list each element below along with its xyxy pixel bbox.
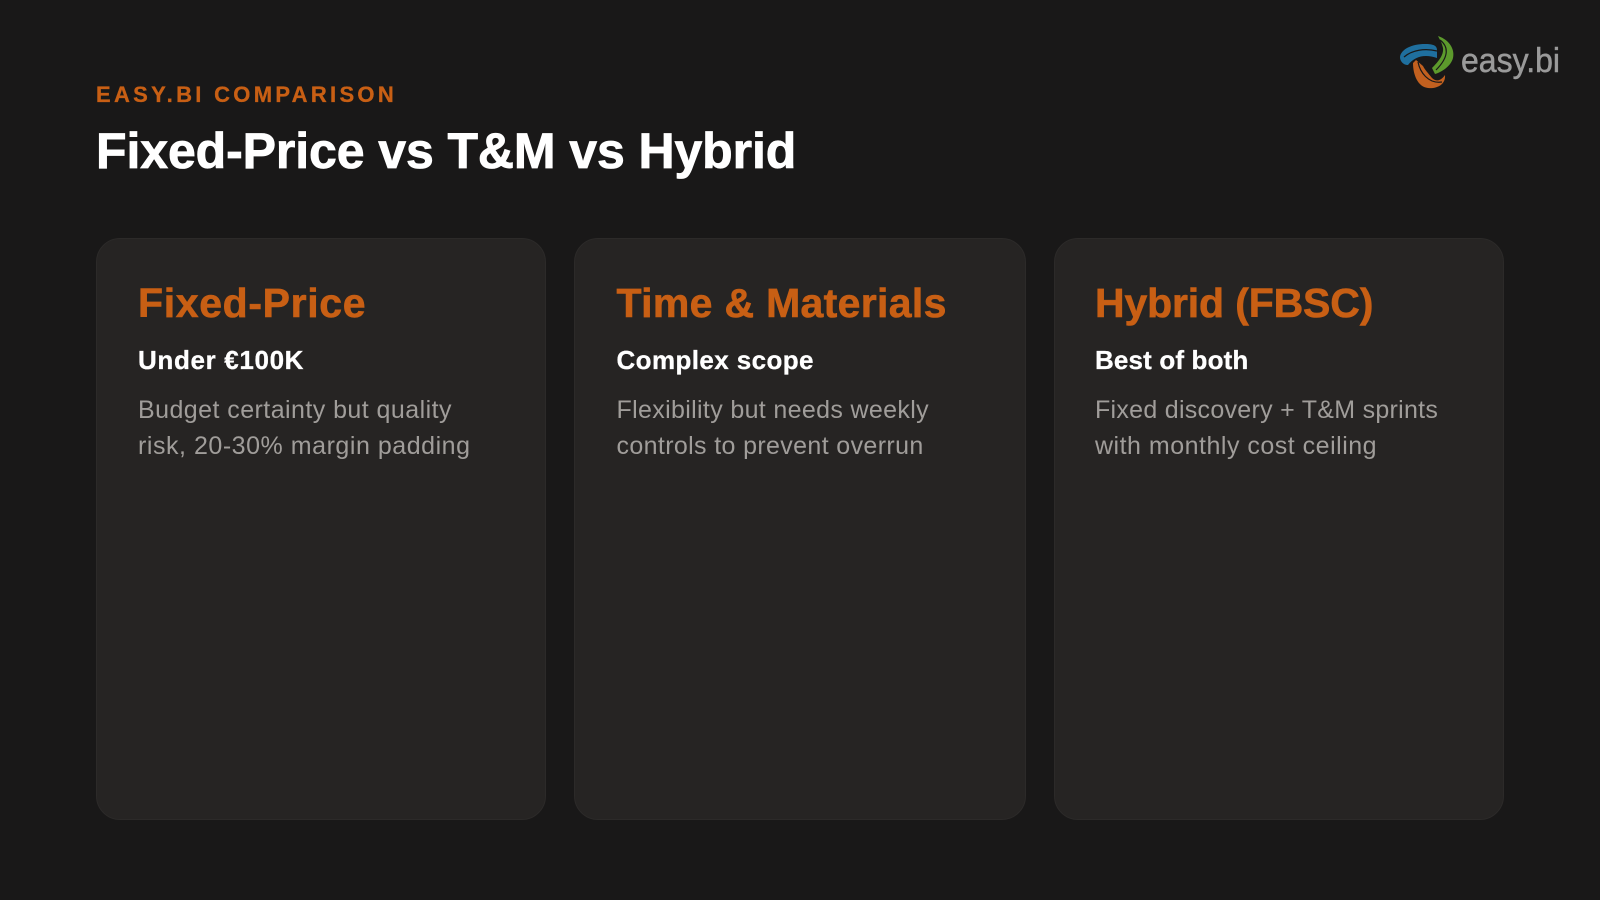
subheading: Best of both: Best of both	[1095, 345, 1248, 375]
title: Fixed-Price vs T&M vs Hybrid	[96, 123, 796, 179]
description: Hybrid line 2: with monthly cost ceiling	[1095, 432, 1377, 460]
description: Time & Materials line 1: Flexibility but needs weekly	[616, 396, 929, 424]
eyebrow label: EASY.BI COMPARISON	[96, 82, 397, 107]
logo: easy.bi: easy.bi	[1461, 42, 1560, 80]
panel: Time & Materials	[574, 238, 1026, 820]
description: Hybrid line 1: Fixed discovery + T&M sprints	[1095, 396, 1438, 424]
heading: Fixed-Price: Fixed-Price	[138, 280, 366, 326]
heading: Time & Materials: Time & Materials	[616, 280, 947, 326]
panel: Fixed-Price	[96, 238, 546, 820]
subheading: Under €100K: Under €100K	[138, 345, 304, 375]
description: Fixed-Price line 1: Budget certainty but quality	[138, 396, 452, 424]
description: Time & Materials line 2: controls to prevent overrun	[616, 432, 924, 460]
subheading: Complex scope: Complex scope	[616, 345, 814, 375]
heading: Hybrid (FBSC): Hybrid (FBSC)	[1095, 280, 1373, 326]
logo: easy.bi	[1400, 36, 1560, 88]
description: Fixed-Price line 2: risk, 20-30% margin padding	[138, 432, 471, 460]
panel: Hybrid (FBSC)	[1054, 238, 1504, 820]
